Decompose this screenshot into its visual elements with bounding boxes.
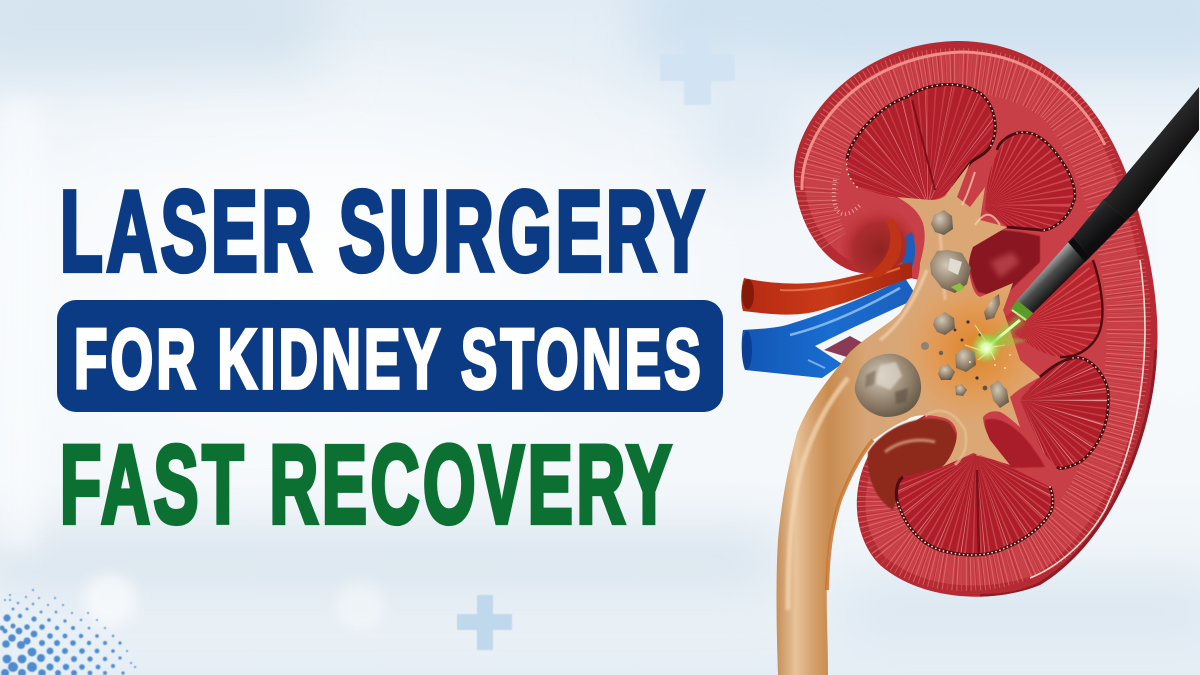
kidney cortex with striations <box>802 51 1157 597</box>
pyramid: bottom <box>894 454 1054 557</box>
ureter and collecting system <box>776 163 1040 675</box>
pyramid: upper <box>846 83 997 200</box>
title: LASER SURGERY: LASER SURGERY <box>60 168 708 296</box>
highlighted subtitle: FOR KIDNEY STONES <box>57 300 723 412</box>
dark renal sinus cavities <box>840 205 1045 510</box>
green laser beam and sparks <box>965 318 1028 369</box>
icon: medical cross bottom <box>457 595 512 650</box>
kidney outer capsule <box>794 41 1158 597</box>
pyramid: upper right <box>985 130 1076 232</box>
halftone dots <box>0 589 136 675</box>
kidney stones <box>855 210 1009 417</box>
renal vein (blue) <box>742 232 918 378</box>
renal artery (red) <box>741 218 912 315</box>
pyramid: right lower <box>1020 356 1110 470</box>
pyramid: right middle <box>1006 260 1104 358</box>
highlighted subtitle: FOR KIDNEY STONES: FOR KIDNEY STONES <box>74 312 704 406</box>
laser endoscope <box>1010 87 1199 320</box>
icon: medical cross top <box>660 30 735 105</box>
kidney illustration <box>741 41 1199 675</box>
title: FAST RECOVERY: FAST RECOVERY <box>60 424 675 546</box>
